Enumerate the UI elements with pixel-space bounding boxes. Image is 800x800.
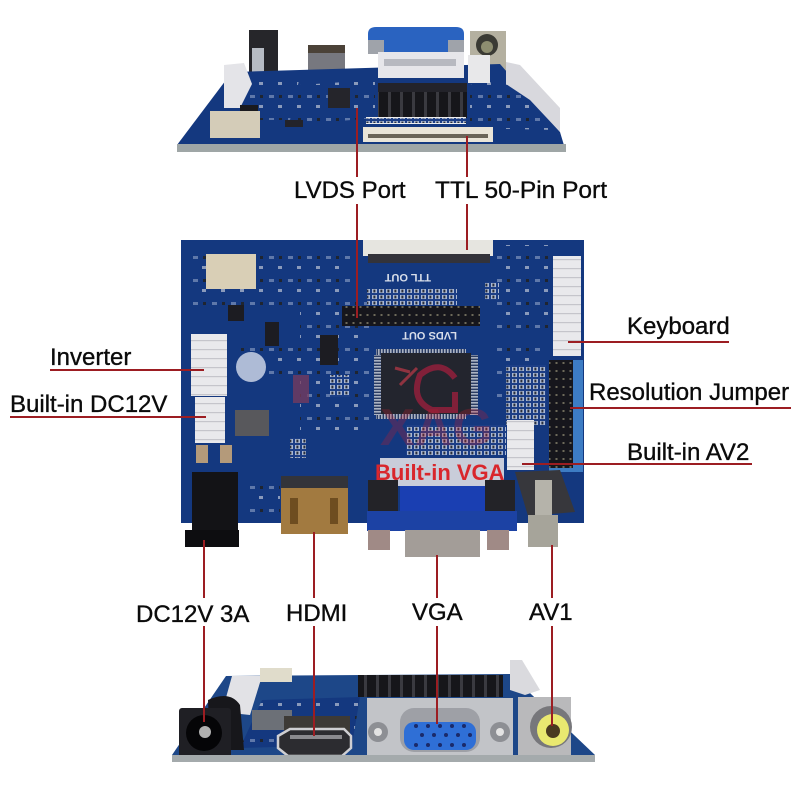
leader line: AV1 (551, 545, 553, 726)
HDMI (278, 716, 351, 756)
TTL connector (363, 240, 493, 256)
VGA (367, 698, 513, 755)
main board photo: LVDS OUT (402, 329, 457, 341)
main IC (376, 349, 466, 357)
RCA (518, 697, 572, 757)
RCA (515, 470, 575, 516)
faint watermark: XAG (380, 399, 493, 457)
label: DC12V 3A: DC12V 3A (136, 601, 249, 628)
leader lines: LVDS Port (356, 108, 358, 318)
label: HDMI: HDMI (286, 600, 347, 627)
label: AV1: AV1 (529, 599, 573, 626)
LVDS pins (342, 306, 480, 326)
top board photo (177, 27, 566, 152)
bottom board photo (172, 660, 595, 762)
main board photo (181, 240, 584, 557)
leader lines: TTL 50-Pin Port (466, 136, 468, 250)
Built-in VGA label: Built-in VGA (375, 460, 505, 485)
white connectors (191, 334, 227, 396)
main board photo: TTL OUT (384, 271, 431, 283)
DC jack (179, 696, 244, 760)
label: TTL 50-Pin Port: TTL 50-Pin Port (435, 177, 607, 204)
leader line: VGA (436, 555, 438, 724)
VGA (380, 458, 504, 486)
callout: Resolution Jumper: Resolution Jumper (589, 379, 789, 406)
label: LVDS Port: LVDS Port (294, 177, 406, 204)
HDMI (281, 476, 348, 492)
leader line: DC12V 3A (203, 540, 205, 722)
callout: Built-in DC12V: Built-in DC12V (10, 391, 167, 418)
label: VGA: VGA (412, 599, 463, 626)
callout: Inverter: Inverter (50, 344, 131, 371)
DC jack (196, 445, 208, 463)
resistor arrays (406, 425, 506, 455)
leader line: HDMI (313, 532, 315, 736)
callout: Keyboard: Keyboard (627, 313, 730, 340)
jumper (549, 360, 583, 472)
capacitor-like beige (206, 254, 256, 289)
callout: Built-in AV2: Built-in AV2 (627, 439, 749, 466)
texture (190, 250, 350, 310)
